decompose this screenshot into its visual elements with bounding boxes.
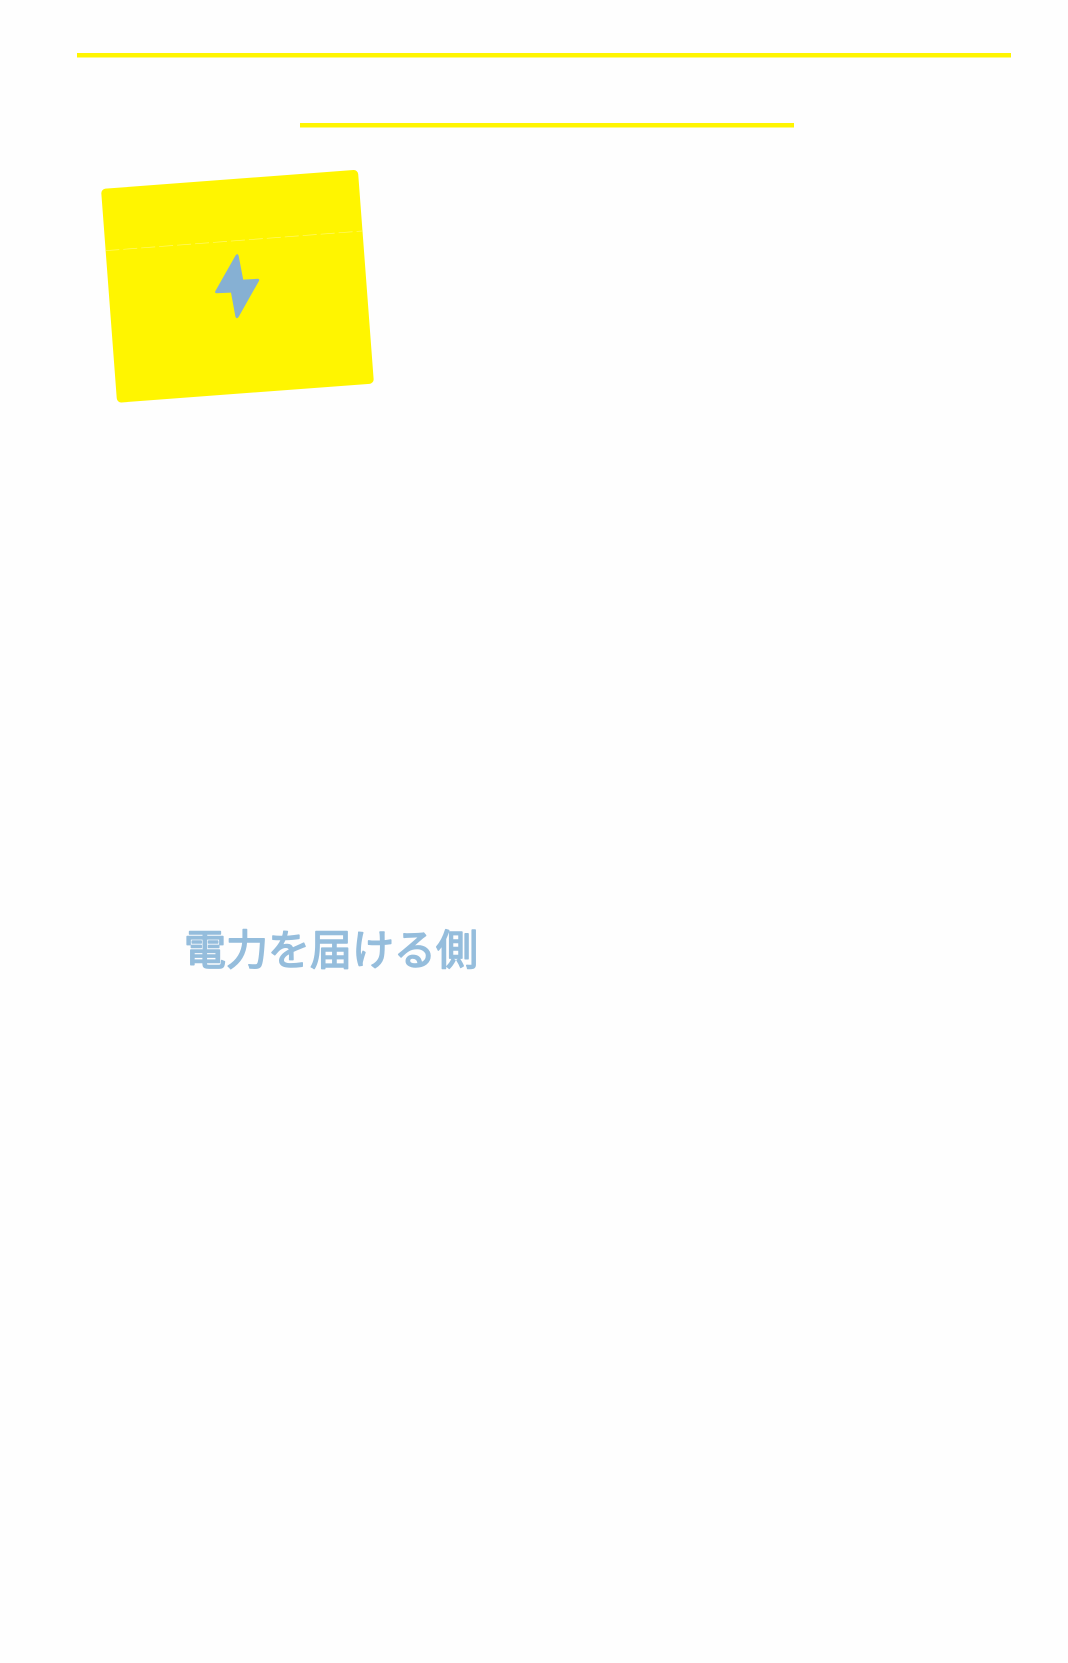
card body: [101, 170, 374, 403]
subtitle underline: [300, 123, 794, 128]
icon: lightning bolt: [215, 254, 259, 318]
panel: yellow envelope card: [101, 170, 374, 403]
card fold line: [105, 231, 362, 251]
title underline: [77, 53, 1011, 58]
heading: power supply side: 電力を届ける側: [184, 927, 478, 974]
